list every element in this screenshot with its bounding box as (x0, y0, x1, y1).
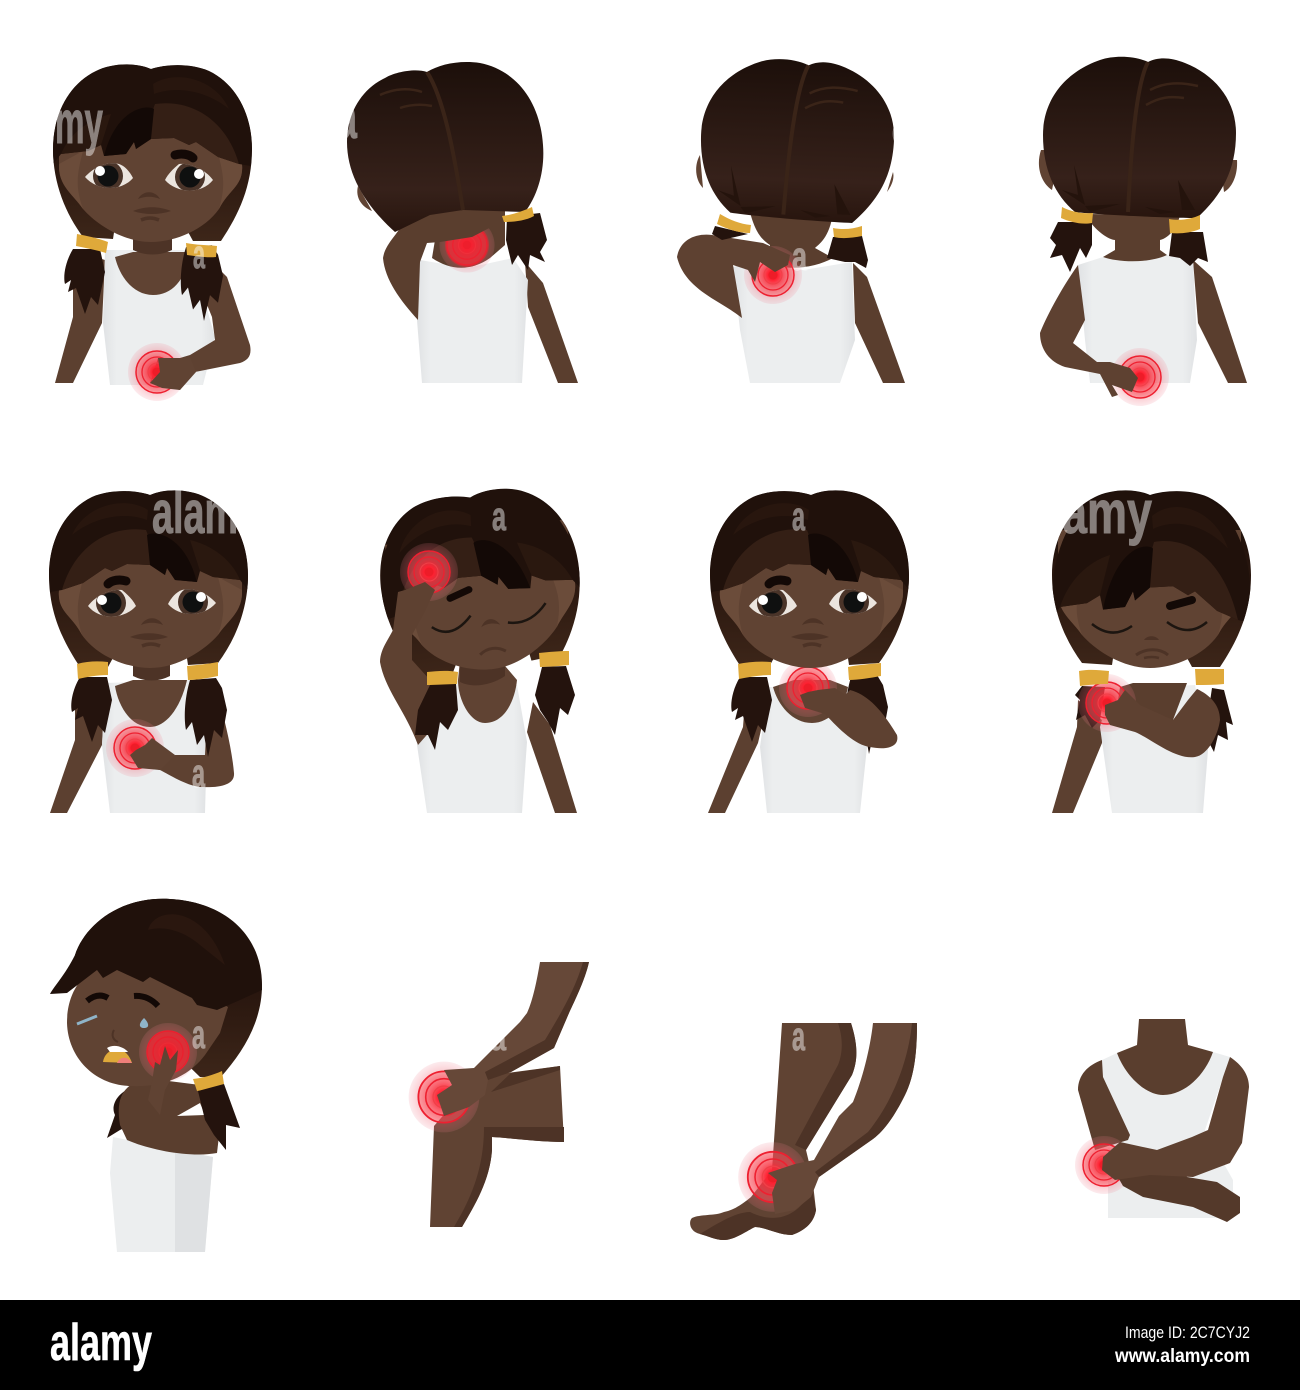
pain mark (139, 1023, 197, 1081)
figure: knee pain (409, 962, 589, 1227)
figure: shoulder pain, back view (677, 56, 905, 383)
watermark text (55, 84, 1152, 1059)
figure: throat pain, front view (708, 490, 909, 813)
arm and hand (437, 962, 589, 1116)
pain mark (779, 659, 837, 717)
pain mark (1111, 348, 1169, 406)
figure: headache, front view (380, 488, 580, 813)
nose (113, 1030, 118, 1042)
figure: stomach ache, back view (1039, 57, 1247, 406)
watermark text: a (193, 233, 205, 277)
pain mark (409, 1062, 479, 1132)
hand (148, 1046, 178, 1115)
left braid (107, 1087, 133, 1138)
pain mark (128, 343, 186, 401)
pain mark (400, 543, 458, 601)
footer bar (0, 1300, 1300, 1390)
pain mark (439, 217, 495, 273)
watermark text: alam (152, 479, 238, 546)
back of head (1043, 57, 1236, 218)
figure: shoulder pain, front view (1052, 490, 1251, 813)
arm and hand (1040, 265, 1138, 397)
lower forearm and hand (1115, 1170, 1240, 1222)
figure: chest pain, front view (49, 490, 248, 813)
watermark text: a (337, 84, 357, 151)
shoulder and arm (119, 1078, 222, 1155)
fringe (50, 899, 262, 1010)
pain mark (106, 719, 164, 777)
watermark text: a (492, 495, 506, 539)
face (53, 64, 252, 242)
tears (77, 1016, 97, 1024)
figure: toothache, crying (50, 899, 262, 1252)
figure: elbow pain, torso (1075, 1019, 1249, 1222)
watermark text: a (192, 1013, 205, 1057)
head hair back (75, 899, 262, 1078)
watermark text: a (892, 89, 910, 156)
pain mark (1075, 1136, 1133, 1194)
watermark text: a (792, 235, 808, 279)
crying mouth (103, 1049, 132, 1063)
upper forearm and hand (1102, 1057, 1249, 1180)
figure: ankle pain (690, 1023, 917, 1240)
face (67, 960, 228, 1086)
raised arm (383, 205, 495, 320)
arm and hand (768, 1023, 917, 1214)
watermark text: a (192, 752, 205, 796)
image id: Image ID: 2C7CYJ2 (1125, 1323, 1250, 1342)
pain mark (1078, 674, 1136, 732)
raised arm (677, 235, 790, 318)
figure: stomach ache, front view (53, 64, 252, 401)
raised arm (380, 582, 440, 745)
arm and hand (1105, 689, 1220, 757)
website: www.alamy.com (1114, 1346, 1250, 1367)
arm and hand (800, 688, 897, 748)
watermark text: my (55, 89, 103, 156)
pain mark (738, 1142, 808, 1212)
back of head (347, 62, 543, 232)
tilted face (382, 488, 580, 670)
face (1052, 490, 1251, 668)
footer logo: alamy (50, 1314, 152, 1372)
watermark text: a (792, 1015, 805, 1059)
figure: neck pain, back view (347, 62, 578, 383)
back of head (698, 56, 897, 224)
face (49, 490, 248, 668)
face (710, 490, 909, 668)
pain mark (744, 246, 802, 304)
hand (130, 738, 175, 770)
watermark text: amy (1062, 479, 1152, 546)
watermark text: a (491, 1021, 506, 1057)
watermark text: a (792, 495, 805, 539)
hand (150, 357, 196, 390)
